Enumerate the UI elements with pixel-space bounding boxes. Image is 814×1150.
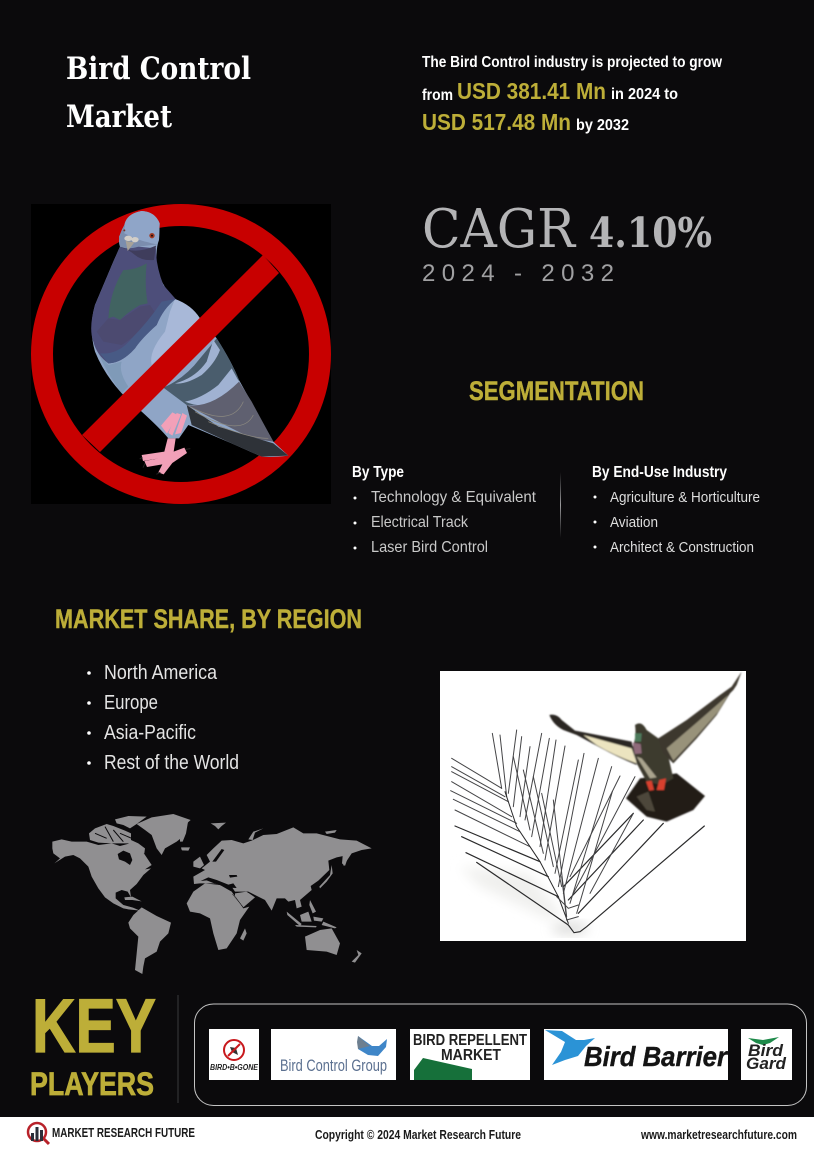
- logo: Bird Gard: Bird: [748, 1041, 784, 1060]
- logo: Bird Gard: Gard: [746, 1054, 787, 1073]
- segment list: by end-use industry: Agriculture & Horticulture: [610, 489, 760, 506]
- region list: North America: [104, 662, 218, 684]
- segment list: by type: By Type: [352, 464, 404, 481]
- logo: Bird Repellent Market: BIRD REPELLENT: [413, 1032, 527, 1049]
- market projection text: USD 381.41 Mn: [457, 78, 606, 104]
- icon: Market Research Future logo: [28, 1123, 49, 1144]
- heading: market share by region: MARKET SHARE, BY REGION: [55, 604, 362, 634]
- market projection text: [422, 54, 722, 135]
- market projection text: The Bird Control industry is projected to grow: [422, 54, 722, 71]
- segment list: by type: Laser Bird Control: [371, 539, 488, 556]
- panel: key player logos: [194, 1004, 806, 1106]
- heading: key players: [30, 984, 156, 1102]
- CAGR figure: 4.10%: [589, 209, 712, 257]
- segment list: by type: Technology & Equivalent: [371, 489, 537, 506]
- region list: Rest of the World: [104, 752, 239, 774]
- logo: Bird-B-Gone: [209, 1029, 259, 1080]
- segment list: by end-use industry: By End-Use Industry: [592, 464, 727, 481]
- segment list: by end-use industry: Architect & Construction: [610, 539, 754, 556]
- title: [66, 51, 251, 135]
- logo: Bird-B-Gone: BIRD•B•GONE: [210, 1063, 259, 1072]
- footer: [0, 1117, 814, 1150]
- region list: [87, 662, 239, 774]
- logo: Bird Repellent Market: [410, 1029, 530, 1080]
- segment list: by type: [352, 464, 537, 556]
- logo: Bird Control Group: [271, 1029, 396, 1080]
- CAGR figure: CAGR: [422, 199, 577, 260]
- heading: key players: PLAYERS: [30, 1066, 154, 1102]
- market projection text: in 2024 to: [611, 86, 678, 103]
- logo: Bird Gard: [741, 1029, 792, 1080]
- segment list: by end-use industry: [592, 464, 760, 556]
- region list: Asia-Pacific: [104, 722, 196, 744]
- title: Market: [66, 99, 173, 135]
- icon: no-bird sign with pigeon: [31, 204, 331, 504]
- logo: Bird Repellent Market: MARKET: [441, 1047, 501, 1064]
- logo: Bird Barrier: Bird Barrier: [584, 1041, 729, 1072]
- region list: Europe: [104, 692, 158, 714]
- heading: key players: KEY: [32, 984, 156, 1069]
- title: Bird Control: [66, 51, 251, 87]
- logo: Bird Control Group: Bird Control Group: [280, 1056, 387, 1075]
- logo: Bird Barrier: [544, 1029, 729, 1080]
- segment list: by end-use industry: Aviation: [610, 514, 658, 531]
- market projection text: by 2032: [576, 117, 629, 134]
- heading: segmentation: SEGMENTATION: [469, 376, 644, 406]
- market projection text: USD 517.48 Mn: [422, 109, 571, 135]
- market projection text: from: [422, 87, 453, 104]
- CAGR figure: [422, 199, 712, 287]
- footer: MARKET RESEARCH FUTURE: [52, 1125, 195, 1140]
- footer: Copyright © 2024 Market Research Future: [315, 1128, 521, 1142]
- world map: [52, 814, 372, 974]
- photo: flying pigeon over bird spikes: [440, 671, 746, 941]
- CAGR figure: 2024 - 2032: [422, 260, 614, 287]
- segment list: by type: Electrical Track: [371, 514, 469, 531]
